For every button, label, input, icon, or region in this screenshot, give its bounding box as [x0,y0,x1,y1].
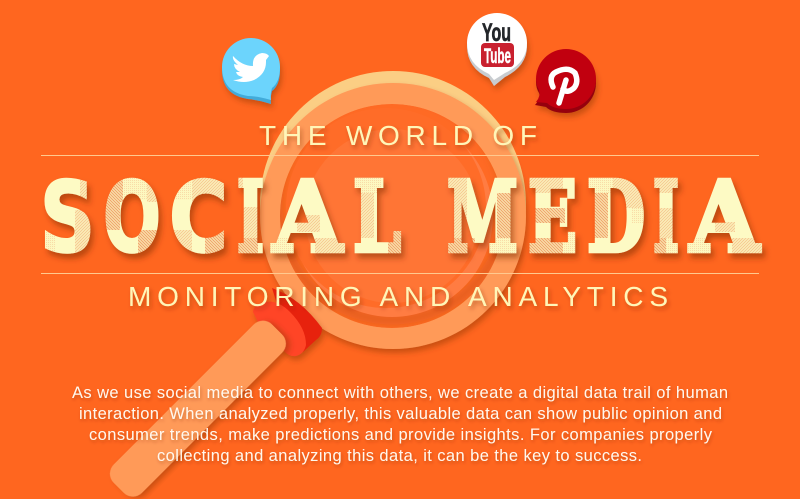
magnifier rim [260,83,526,349]
intro paragraph: As we use social media to connect with others, we create a digital data trail of human [72,384,728,402]
subtitle: MONITORING AND ANALYTICS [128,281,668,312]
divider bottom [41,273,759,274]
magnifier handle [105,315,291,499]
word: media: D [587,160,645,274]
magnifier lens [278,92,506,328]
intro paragraph: interaction. When analyzed properly, this valuable data can show public opinion and [79,405,722,423]
collar dark band [272,288,322,352]
intro paragraph: consumer trends, make predictions and provide insights. For companies properly [89,426,713,444]
pinterest p mark [551,69,577,103]
youtube tube text: Tube [484,45,511,68]
word: media: E [528,160,577,274]
word: social: L [353,160,401,274]
icon: twitter bubble [222,38,280,104]
twitter bird [233,53,269,82]
word: media: A [689,160,761,274]
word: social: A [272,160,344,274]
word: social: O [103,161,161,274]
twitter bubble side [222,41,280,104]
word: social: S [40,161,95,274]
collar bright band [253,302,306,356]
twitter bubble face [222,38,280,100]
icon: youtube bubble [467,13,527,86]
word: social: I [237,160,264,274]
divider top [41,155,759,156]
main title [40,160,761,274]
youtube bubble side [467,16,527,86]
pinterest bubble face [536,49,596,109]
word: social: C [169,161,228,274]
pinterest bubble side [535,53,596,113]
icon: pinterest bubble [535,49,596,113]
word: media: I [653,160,679,274]
magnifier rim highlight [260,71,526,337]
intro paragraph: collecting and analyzing this data, it can be the key to success. [157,447,642,465]
title line one: THE WORLD OF [259,120,537,151]
icon: magnifying glass [105,71,526,499]
magnifier collar [253,288,322,356]
youtube bubble face [467,13,527,80]
youtube red box [481,43,514,67]
youtube you text: You [482,19,511,47]
intro paragraph [72,384,728,465]
word: media: M [447,160,518,274]
